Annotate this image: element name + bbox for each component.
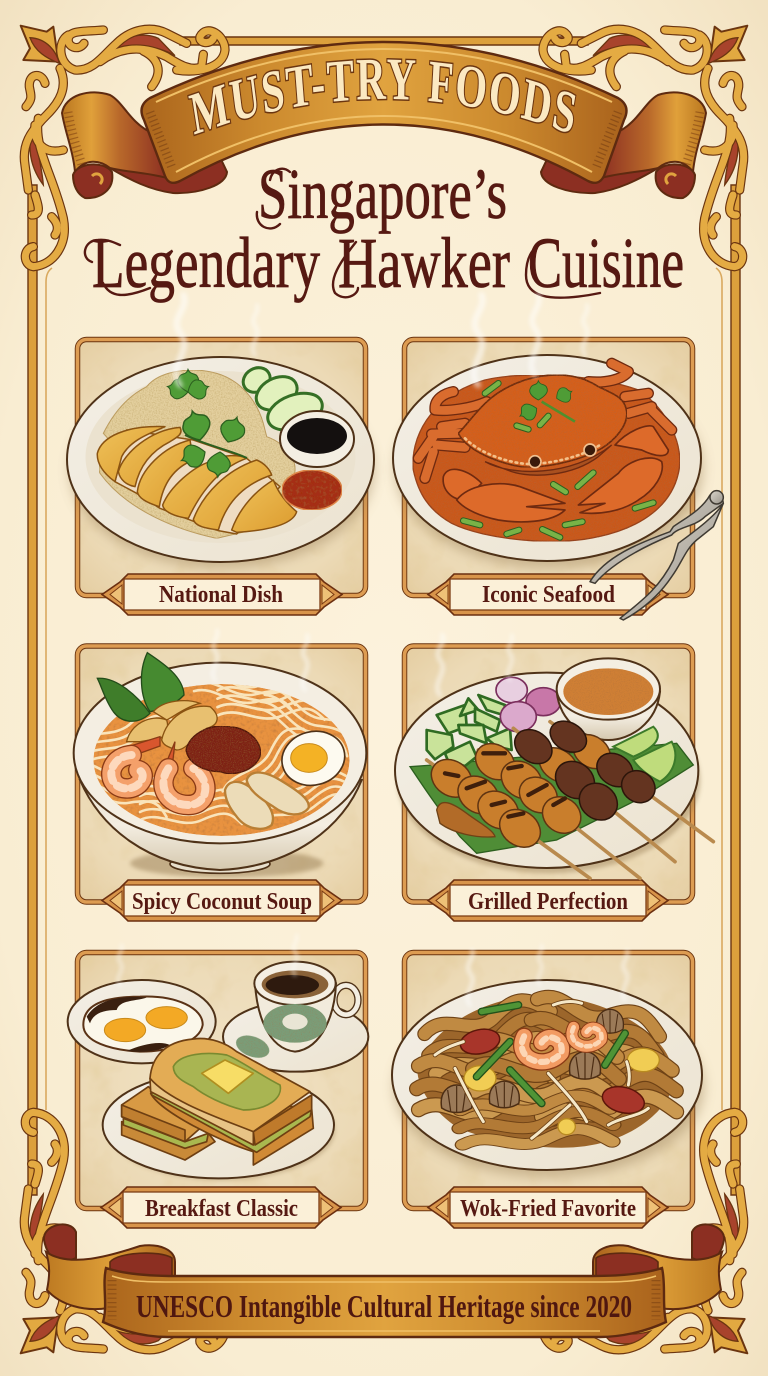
- breakfast set: [68, 962, 368, 1180]
- crab legs: [418, 363, 672, 478]
- shrimp: [111, 737, 205, 805]
- satay plate: [395, 658, 713, 878]
- cucumber slices: [239, 363, 327, 437]
- beef satay: [508, 715, 661, 828]
- tofu puffs: [127, 701, 217, 750]
- ribbon right tail: [601, 92, 706, 198]
- grill marks: [445, 753, 565, 817]
- label: wok-fried favorite: Wok-Fried Favorite: [460, 1196, 636, 1222]
- kopi cup: [233, 962, 358, 1062]
- plate: [395, 673, 700, 873]
- basil leaves: [97, 653, 184, 721]
- banana leaf: [410, 743, 693, 853]
- crab in chilli sauce: [413, 363, 723, 620]
- red onion: [496, 677, 561, 732]
- label: wok-fried favorite: [428, 1187, 668, 1228]
- title: [85, 154, 684, 303]
- label: national dish: National Dish: [159, 582, 283, 608]
- label: spicy coconut soup: [102, 880, 342, 921]
- saucer: [223, 1002, 368, 1072]
- right toast: [150, 1039, 313, 1165]
- title: Cuisine: [528, 223, 684, 303]
- fish cakes: [225, 772, 309, 829]
- plate: [393, 355, 703, 568]
- left toast: [122, 1087, 215, 1160]
- cilantro: [165, 370, 249, 478]
- label: iconic seafood: Iconic Seafood: [482, 582, 616, 608]
- wok toppings: [435, 1002, 659, 1138]
- ribbon centre band: [103, 1268, 666, 1337]
- panel: wok-fried favorite: [392, 952, 704, 1228]
- sliced chicken: [97, 427, 297, 534]
- plate: [67, 357, 374, 568]
- label: grilled perfection: Grilled Perfection: [468, 889, 628, 915]
- plate: [392, 980, 704, 1177]
- panel: iconic seafood: [393, 340, 723, 620]
- sprouts: [435, 1002, 648, 1138]
- crab shell: [458, 375, 627, 468]
- ribbon right fold: [541, 153, 658, 193]
- label: national dish: [102, 574, 342, 615]
- ribbon left tail: [62, 92, 167, 198]
- chives: [477, 1005, 625, 1103]
- ribbon left tail: [44, 1224, 175, 1309]
- panel: spicy coconut soup: [68, 646, 366, 921]
- satay sticks: [427, 722, 713, 878]
- crab underside: [485, 445, 612, 475]
- label: grilled perfection: [428, 880, 668, 921]
- steam wisps: [118, 295, 628, 1005]
- cucumber chunks: [427, 695, 512, 766]
- kaya toast: [122, 1039, 313, 1165]
- sauce smear: [437, 803, 495, 837]
- clams: [441, 1009, 623, 1112]
- panel: national dish: [67, 340, 374, 615]
- laksa bowl: [74, 663, 366, 877]
- bottom ribbon banner: [44, 1224, 724, 1337]
- toast plate: [103, 1072, 335, 1180]
- ribbon right tail: [593, 1224, 724, 1309]
- label: spicy coconut soup: Spicy Coconut Soup: [132, 889, 312, 915]
- char kway teow noodles: [417, 991, 678, 1152]
- label: breakfast classic: [101, 1187, 341, 1228]
- soy sauce dish: [280, 411, 354, 467]
- sambal: [186, 726, 261, 774]
- egg pieces: [464, 1048, 659, 1135]
- title: Legendary: [92, 223, 320, 303]
- ribbon heading: MUST-TRY FOODS: [187, 58, 576, 136]
- crab claws: [443, 426, 668, 522]
- egg plate: [68, 980, 216, 1063]
- chili sauce: [282, 470, 342, 510]
- title: Hawker: [338, 223, 510, 303]
- panel: grilled perfection: [395, 646, 713, 921]
- panel: breakfast classic: [68, 952, 368, 1228]
- chicken satay: [424, 728, 617, 855]
- lime wedges: [613, 727, 675, 782]
- boiled egg: [276, 724, 351, 792]
- chicken rice mound: [99, 370, 295, 538]
- laksa toppings: [97, 653, 351, 829]
- soup and noodles: [94, 684, 350, 836]
- ribbon left fold: [110, 153, 227, 193]
- top ribbon banner: [61, 40, 707, 200]
- ribbon centre arc: [142, 42, 626, 183]
- title: Singapore’s: [258, 154, 507, 234]
- shrimp: [522, 1027, 602, 1062]
- label: breakfast classic: Breakfast Classic: [145, 1196, 298, 1222]
- spring onion bits: [463, 383, 653, 537]
- sausage slices: [458, 1026, 647, 1117]
- icon: crab cracker: [590, 491, 723, 620]
- peanut sauce bowl: [557, 658, 660, 740]
- chilli sauce pool: [413, 375, 680, 541]
- label: iconic seafood: [428, 574, 668, 615]
